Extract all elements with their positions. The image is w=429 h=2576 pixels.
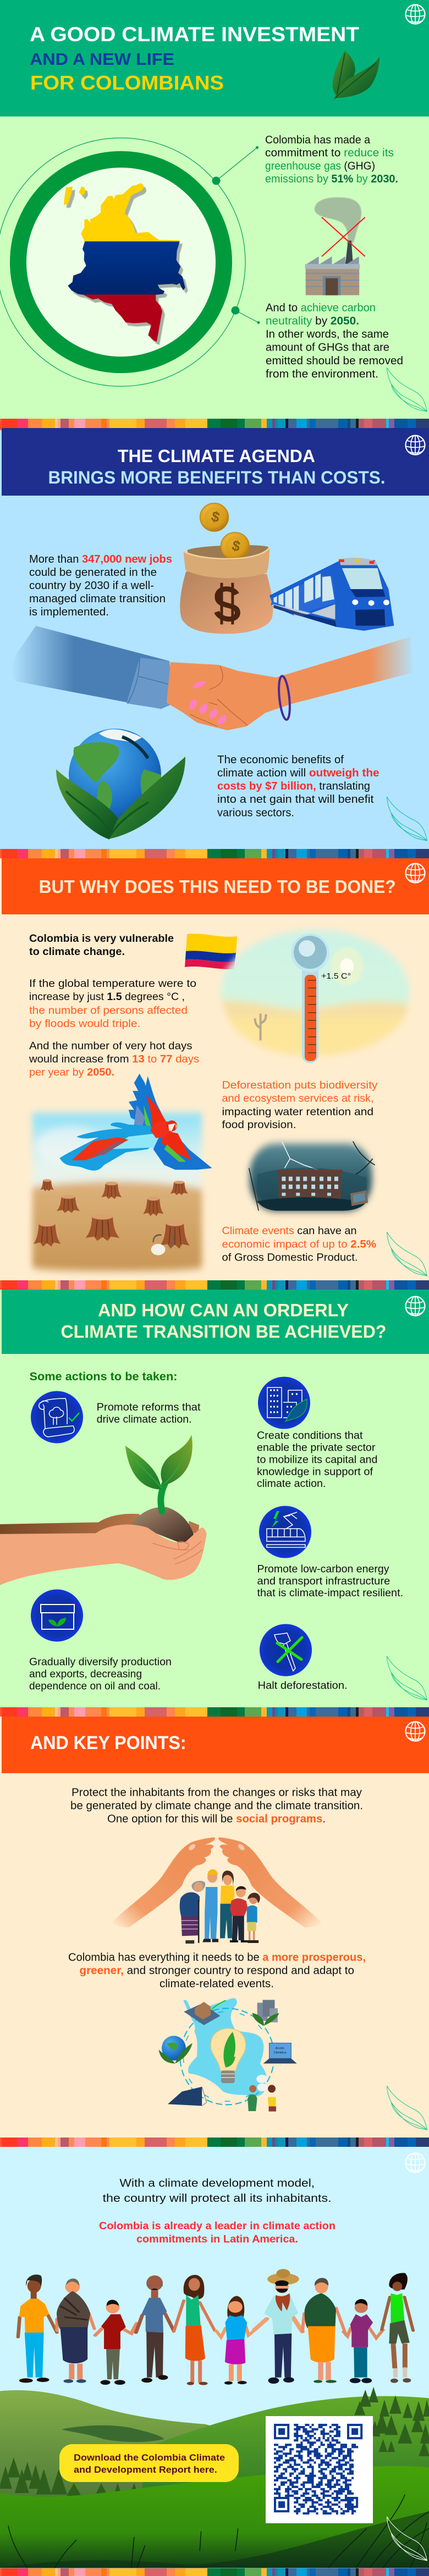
button: download report xyxy=(59,2444,239,2482)
text: deforestation xyxy=(222,1080,378,1131)
illustration: thermometer in desert xyxy=(221,930,410,1063)
text: deforestation: Deforestation puts biodiversity xyxy=(222,1080,378,1091)
icon: World Bank globe xyxy=(406,1722,425,1741)
icon: electric tram xyxy=(259,1506,311,1558)
heading xyxy=(48,446,385,487)
title: A GOOD CLIMATE INVESTMENT xyxy=(30,23,359,46)
text: floods and hot days: increase by just 1.5 degrees °C , xyxy=(29,991,185,1003)
heading: BUT WHY DOES THIS NEED TO BE DONE? xyxy=(39,876,396,897)
illustration: protective hands over family xyxy=(109,1837,324,1944)
panel: key points xyxy=(2,1717,429,2130)
text: vulnerability: Colombia is very vulnerable xyxy=(29,933,174,945)
text: floods and hot days: the number of persons affected xyxy=(29,1005,188,1017)
text: floods and hot days: And the number of very hot days xyxy=(29,1041,193,1052)
text: low-carbon energy: that is climate-impact resilient. xyxy=(257,1587,403,1599)
illustration: deforested land xyxy=(32,1113,202,1271)
text: diversify production: and exports, decreasing xyxy=(29,1668,142,1680)
text: 347,000 jobs: could be generated in the xyxy=(29,567,157,579)
icon: World Bank globe xyxy=(406,864,425,882)
decorative colour strip 6 xyxy=(0,2568,429,2576)
text: low-carbon energy xyxy=(257,1563,403,1599)
panel: climate agenda benefits xyxy=(0,421,429,841)
person 5 xyxy=(174,2275,215,2385)
icon: leaf outline xyxy=(387,2517,427,2561)
text: vulnerability: to climate change. xyxy=(29,946,125,958)
text: carbon neutrality by 2050: In other words, the same xyxy=(266,328,389,340)
text: floods and hot days: would increase from 13 to 77 days xyxy=(29,1054,199,1065)
illustration: money bag with coins xyxy=(180,503,273,634)
decorative colour strip 3 xyxy=(0,1280,429,1290)
text: leader in Latin America: commitments in Latin America. xyxy=(136,2234,298,2245)
text: benefits outweigh costs: into a net gain that will benefit xyxy=(217,793,374,806)
QR code xyxy=(266,2416,373,2523)
laptop xyxy=(263,2043,297,2063)
illustration: planet piggy bank in leaves xyxy=(56,729,185,839)
icon: World Bank globe xyxy=(406,1297,425,1315)
icon: leaf outline xyxy=(387,797,427,841)
text: diversify production xyxy=(29,1656,172,1692)
text: floods and hot days xyxy=(29,978,199,1079)
text: benefits outweigh costs: costs by $7 billion, translating xyxy=(217,780,370,792)
icon: World Bank globe xyxy=(406,4,425,24)
person 10 xyxy=(382,2273,413,2383)
text: deforestation: and ecosystem services at risk, xyxy=(222,1093,374,1104)
button: download report: Download the Colombia Climate xyxy=(74,2452,225,2463)
icon: leaf outline xyxy=(387,368,427,412)
text: climate events: of Gross Domestic Product. xyxy=(222,1252,358,1264)
text: carbon neutrality by 2050: emitted should be removed xyxy=(266,355,403,367)
text: more prosperous: greener, and stronger country to respond and adapt to xyxy=(79,1964,354,1977)
person 3 xyxy=(95,2300,137,2385)
callout connectors xyxy=(212,146,260,324)
text: benefits outweigh costs xyxy=(217,754,380,819)
heading: BRINGS MORE BENEFITS THAN COSTS. xyxy=(48,468,385,487)
button: download report: and Development Report here. xyxy=(74,2464,217,2475)
heading: AND HOW CAN AN ORDERLY xyxy=(98,1301,349,1320)
buildings with leaves xyxy=(252,2000,279,2025)
header band xyxy=(0,421,429,496)
text: halt deforestation: Halt deforestation. xyxy=(258,1680,348,1691)
text: commitment 51% by 2030: emissions by 51% by 2030. xyxy=(265,173,398,185)
title: FOR COLOMBIANS xyxy=(30,71,224,94)
text: protect all inhabitants xyxy=(103,2177,332,2205)
text: protect inhabitants: One option for this will be social programs. xyxy=(107,1813,326,1825)
person 1 xyxy=(18,2274,57,2383)
icon: export box with leaves xyxy=(31,1589,83,1642)
text: protect inhabitants xyxy=(70,1786,363,1825)
text: carbon neutrality by 2050 xyxy=(266,302,403,380)
text: coin dollar signs: $ xyxy=(210,508,222,526)
header band xyxy=(2,1290,429,1354)
laptop: Climática xyxy=(274,2051,287,2055)
laptop: Acción xyxy=(276,2047,284,2050)
decorative colour strip 4 xyxy=(0,1707,429,1717)
icon: leaf outline xyxy=(387,1232,427,1276)
decorative colour strip 1 xyxy=(0,419,429,428)
people talking xyxy=(248,2075,276,2112)
icon: axe crossed out xyxy=(260,1624,312,1676)
title xyxy=(30,23,359,94)
text: 347,000 jobs xyxy=(29,553,172,618)
text: protect inhabitants: Protect the inhabitants from the changes or risks that may xyxy=(72,1786,362,1798)
illustration: electric train xyxy=(270,558,394,631)
panel: intro commitment section xyxy=(0,0,429,412)
text: private sector: knowledge in support of xyxy=(257,1466,373,1478)
person 8 xyxy=(302,2278,346,2383)
text: private sector: climate action. xyxy=(257,1478,326,1490)
icon: scroll with tree xyxy=(31,1391,83,1443)
icon: World Bank globe xyxy=(406,2153,425,2173)
text: carbon neutrality by 2050: And to achieve carbon xyxy=(266,302,376,314)
text: commitment 51% by 2030: Colombia has made a xyxy=(265,134,371,146)
map of Colombia with flag colours xyxy=(64,183,188,345)
text: carbon neutrality by 2050: amount of GHGs that are xyxy=(266,341,389,353)
text: more prosperous: Colombia has everything it needs to be a more prosperous, xyxy=(68,1951,366,1963)
heading xyxy=(61,1301,386,1342)
text: commitment 51% by 2030: commitment to reduce its xyxy=(265,147,394,159)
text: 347,000 jobs: country by 2030 if a well- xyxy=(29,580,154,592)
icon: factory crossed out xyxy=(305,197,365,295)
text: carbon neutrality by 2050: from the environment. xyxy=(266,368,378,380)
text: climate events: Climate events can have an xyxy=(222,1225,356,1237)
text: 347,000 jobs: managed climate transition xyxy=(29,593,166,605)
text: leader in Latin America xyxy=(99,2220,336,2245)
text: benefits outweigh costs: climate action will outweigh the xyxy=(217,767,380,779)
text: promote reforms: drive climate action. xyxy=(97,1414,192,1425)
text: protect all inhabitants: With a climate development model, xyxy=(119,2177,315,2189)
text: floods and hot days: by floods would triple. xyxy=(29,1018,141,1030)
text: private sector: enable the private sector xyxy=(257,1442,376,1454)
text: diversify production: Gradually diversify production xyxy=(29,1656,172,1668)
icon: leaf outline xyxy=(387,1656,427,1700)
header band xyxy=(2,858,429,914)
text: promote reforms: Promote reforms that xyxy=(97,1402,201,1413)
solar panel xyxy=(168,2087,207,2106)
illustration: landscape xyxy=(0,2387,429,2568)
heading: THE CLIMATE AGENDA xyxy=(118,446,315,466)
text: floods and hot days: If the global temperature were to xyxy=(29,978,196,990)
text: protect all inhabitants: the country will protect all its inhabitants. xyxy=(103,2192,332,2205)
text: 347,000 jobs: More than 347,000 new jobs xyxy=(29,553,172,565)
illustration: people holding hands xyxy=(18,2269,413,2385)
person 6 xyxy=(216,2296,257,2385)
header band xyxy=(0,0,429,116)
panel: why it needs to be done xyxy=(2,858,429,1276)
text: low-carbon energy: and transport infrastructure xyxy=(257,1575,390,1587)
icon: two leaves xyxy=(332,51,380,99)
text: leader in Latin America: Colombia is already a leader in climate action xyxy=(99,2220,336,2232)
diagram: Colombia map in ring xyxy=(0,138,245,386)
header band xyxy=(2,1717,429,1773)
illustration: storm and flooded building xyxy=(249,1141,375,1211)
person 9 xyxy=(343,2299,383,2383)
text: more prosperous: climate-related events. xyxy=(160,1978,274,1990)
family group xyxy=(180,1869,260,1944)
text: climate events: economic impact of up to 2.5% xyxy=(222,1239,376,1251)
person 7 xyxy=(255,2269,302,2384)
text: benefits outweigh costs: various sectors. xyxy=(217,807,294,819)
small globe with leaves xyxy=(159,2036,193,2063)
text: second coin dollar sign: $ xyxy=(230,537,243,555)
icon: Colombian flag xyxy=(185,934,237,969)
decorative colour strip 5 xyxy=(0,2138,429,2147)
panel: closing with people and QR xyxy=(0,2153,429,2568)
person 2 xyxy=(57,2279,95,2383)
text: climate events xyxy=(222,1225,376,1264)
text: deforestation: food provision. xyxy=(222,1119,296,1131)
text: commitment 51% by 2030 xyxy=(265,134,398,185)
illustration: hands holding sprout xyxy=(0,1435,207,1585)
text: private sector: Create conditions that xyxy=(257,1430,363,1442)
text: private sector: to mobilize its capital and xyxy=(257,1454,377,1465)
illustration: thermometer in desert: +1.5 C° xyxy=(321,972,351,981)
text: carbon neutrality by 2050: neutrality by 2050. xyxy=(266,315,359,327)
subheading: Some actions to be taken: xyxy=(30,1370,177,1383)
decorative colour strip 2 xyxy=(0,849,429,858)
text: deforestation: impacting water retention and xyxy=(222,1107,373,1118)
title: AND A NEW LIFE xyxy=(30,49,174,69)
text: 347,000 jobs: is implemented. xyxy=(29,606,109,618)
illustration: cycle around lightbulb on map xyxy=(159,1998,297,2112)
icon: buildings with leaf xyxy=(258,1377,310,1429)
icon: World Bank globe xyxy=(406,435,425,455)
tray with box xyxy=(184,2001,226,2025)
illustration: scarlet macaw xyxy=(59,1074,212,1170)
illustration: handshake xyxy=(12,626,413,730)
person 4 xyxy=(136,2275,174,2383)
text: vulnerability xyxy=(29,933,174,958)
text: diversify production: dependence on oil and coal. xyxy=(29,1680,161,1692)
text: promote reforms xyxy=(97,1402,201,1425)
panel: how to achieve the transition xyxy=(0,1290,429,1700)
text: low-carbon energy: Promote low-carbon energy xyxy=(257,1563,389,1575)
text: private sector xyxy=(257,1430,377,1490)
heading: AND KEY POINTS: xyxy=(30,1733,186,1753)
heading: CLIMATE TRANSITION BE ACHIEVED? xyxy=(61,1322,386,1342)
text: benefits outweigh costs: The economic benefits of xyxy=(217,754,344,766)
text: protect inhabitants: be generated by climate change and the climate transition. xyxy=(70,1800,363,1812)
text: commitment 51% by 2030: greenhouse gas (GHG) xyxy=(265,160,375,173)
icon: leaf outline xyxy=(387,2086,427,2130)
text: floods and hot days: per year by 2050. xyxy=(29,1067,114,1079)
text: more prosperous xyxy=(68,1951,366,1990)
